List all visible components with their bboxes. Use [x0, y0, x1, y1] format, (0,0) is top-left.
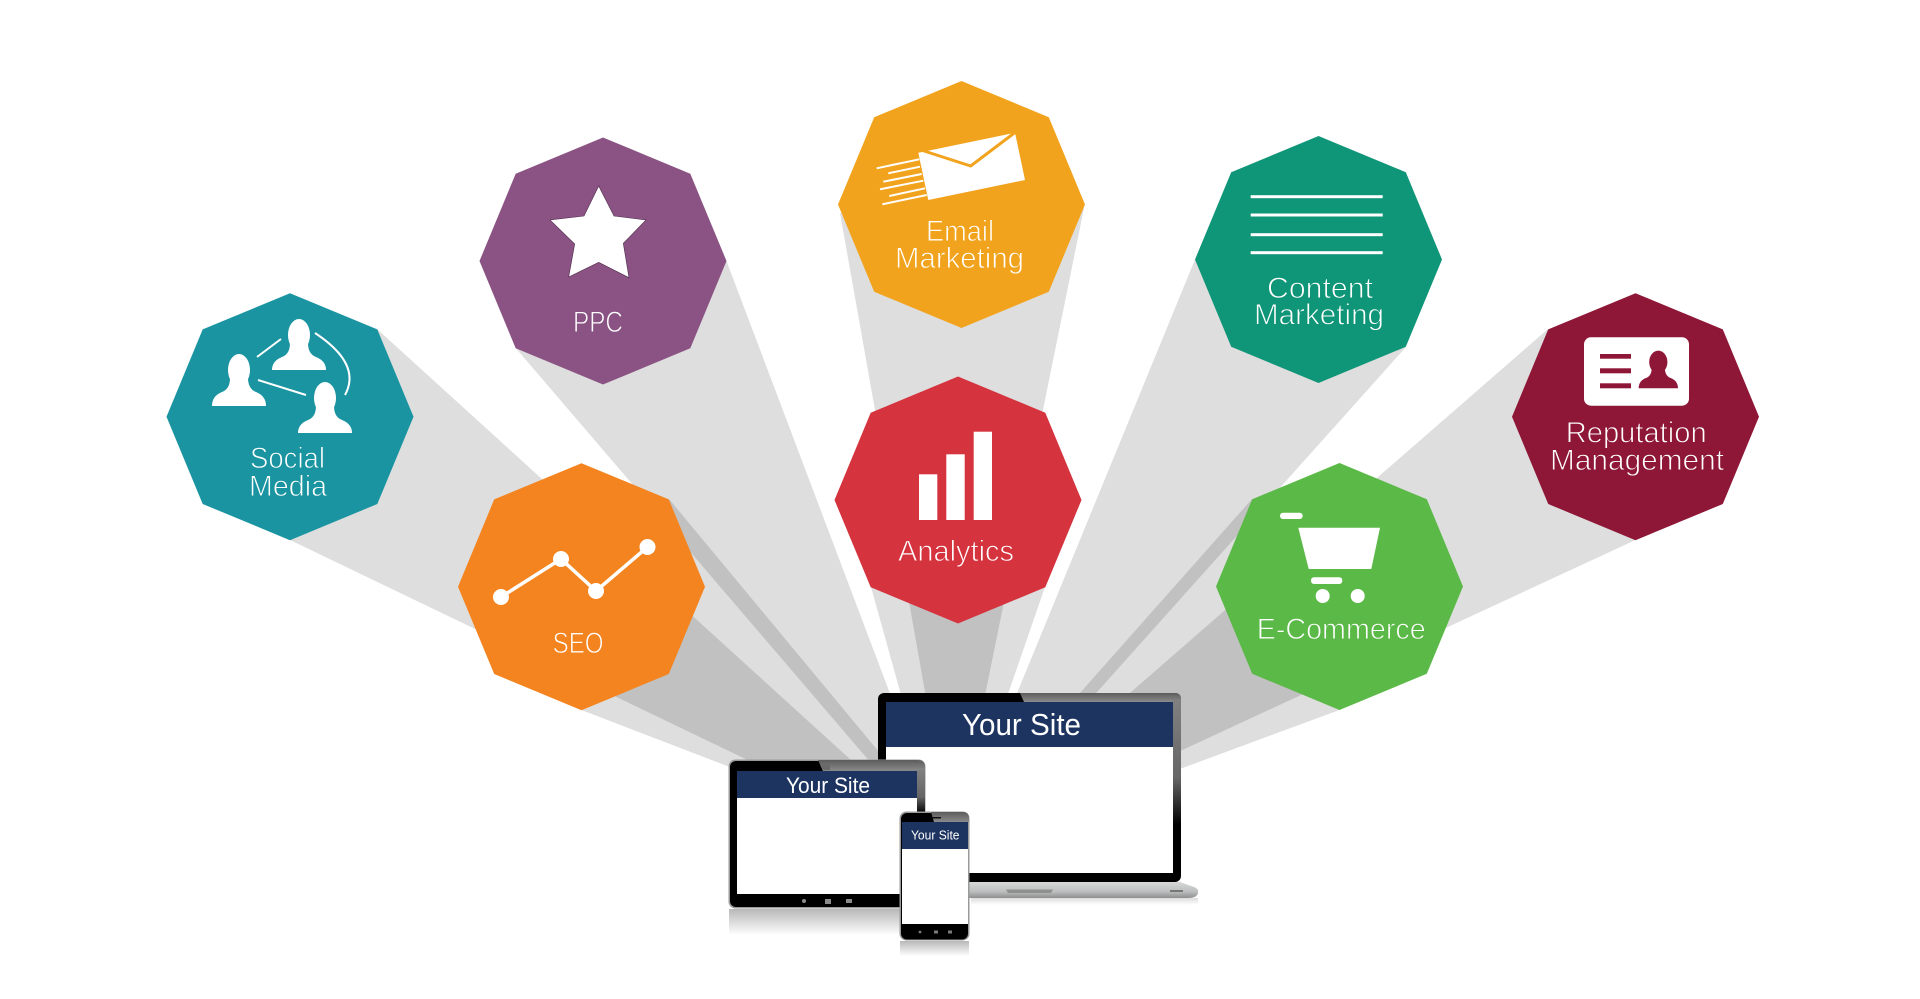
- device: phone: Your Site: [911, 827, 960, 842]
- panel: SEO: [458, 463, 705, 710]
- tablet buttons: [802, 899, 852, 904]
- label: Content Marketing: [1254, 272, 1384, 332]
- device: tablet: Your Site: [786, 773, 870, 798]
- label: Social Media: Media: [249, 470, 327, 503]
- phone body: [900, 812, 970, 940]
- beam: SEO: [582, 499, 894, 770]
- panel: content marketing: [1195, 136, 1442, 383]
- beam: e-commerce: [1056, 499, 1340, 780]
- beam: content marketing: [1006, 260, 1406, 720]
- label: Reputation Management: Reputation: [1566, 417, 1707, 450]
- laptop header: [886, 702, 1173, 747]
- label: PPC: PPC: [573, 306, 623, 339]
- beam: PPC: [516, 261, 900, 770]
- label: Social Media: [249, 442, 327, 503]
- tablet header: [737, 771, 917, 798]
- label: Reputation Management: [1550, 417, 1725, 477]
- panel: email marketing: [838, 81, 1085, 328]
- label: Analytics: Analytics: [898, 535, 1014, 568]
- panel: analytics: [834, 376, 1082, 624]
- label: Email Marketing: [895, 215, 1024, 275]
- label: Social Media: Social: [250, 442, 325, 475]
- device: laptop: Your Site: [962, 707, 1081, 742]
- label: SEO: SEO: [553, 627, 604, 660]
- tablet body: [728, 760, 926, 908]
- panel: e-commerce: [1216, 463, 1463, 710]
- label: E-Commerce: E-Commerce: [1257, 613, 1426, 646]
- panel: reputation management: [1512, 293, 1759, 540]
- phone screen: [902, 822, 968, 924]
- light beams from services to devices: [290, 208, 1636, 780]
- tablet screen: [737, 771, 917, 894]
- label: Content Marketing: Marketing: [1254, 298, 1384, 332]
- icon: envelope: [877, 131, 1025, 204]
- label: Email Marketing: Email: [926, 215, 994, 248]
- device: laptop: [878, 693, 1198, 905]
- icon: star: [550, 186, 646, 278]
- beam: reputation management: [1100, 329, 1636, 765]
- laptop reflection: [971, 898, 1198, 905]
- beam: email marketing: [840, 208, 1084, 720]
- phone buttons: [919, 930, 952, 934]
- phone header: [902, 822, 968, 849]
- icon: line graph: [493, 539, 656, 605]
- tablet reflection: [729, 909, 925, 935]
- icon: bar chart: [919, 432, 992, 520]
- laptop bezel: [878, 693, 1181, 882]
- beam: social media: [290, 329, 862, 770]
- panel: social media: [166, 293, 414, 540]
- icon: id card: [1584, 337, 1689, 406]
- beam: analytics: [871, 587, 1045, 720]
- icon: connected people: [212, 319, 352, 433]
- icon: text lines: [1251, 195, 1383, 254]
- label: Reputation Management: Management: [1550, 444, 1725, 477]
- device: tablet: [728, 760, 926, 935]
- panel: PPC: [480, 138, 726, 384]
- phone reflection: [900, 941, 969, 956]
- icon: shopping cart: [1280, 513, 1380, 603]
- laptop base: [960, 882, 1198, 898]
- label: Content Marketing: Content: [1267, 272, 1374, 305]
- laptop screen: [886, 702, 1173, 873]
- label: Email Marketing: Marketing: [895, 242, 1024, 275]
- device: phone: [900, 812, 970, 956]
